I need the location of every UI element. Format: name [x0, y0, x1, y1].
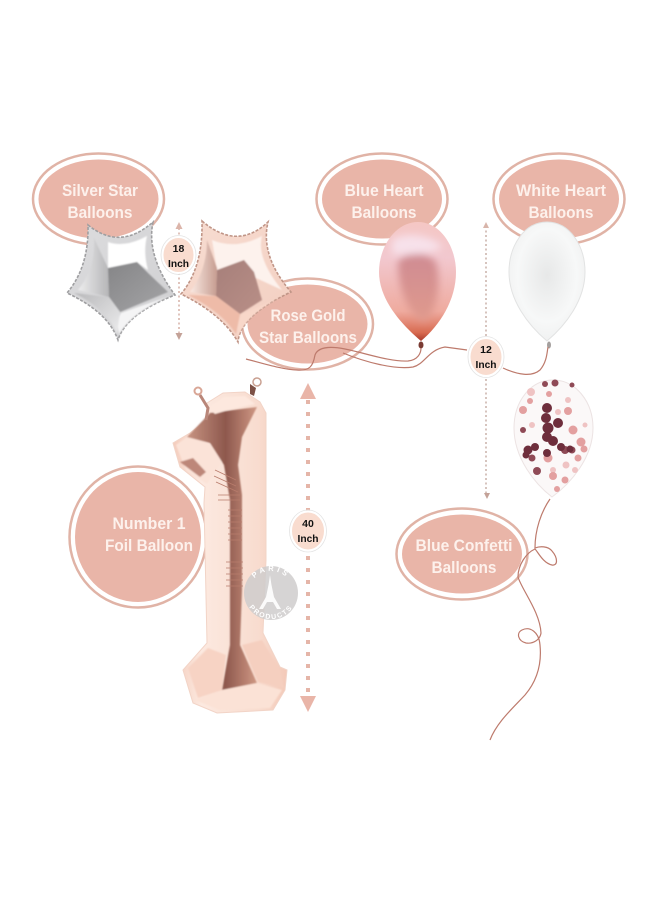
icon: silver star balloon: [67, 222, 175, 340]
callout: White Heart Balloons: [494, 154, 624, 244]
callout: Blue Heart Balloons: [316, 154, 448, 244]
callout: Silver Star Balloons: Silver Star: [62, 182, 139, 200]
callout: Blue Heart Balloons: Blue Heart: [344, 182, 424, 200]
callout: Number 1 Foil Balloon: Number 1: [112, 515, 186, 533]
badge: 40 inch: Inch: [298, 533, 318, 545]
icon: number 1 foil balloon: [173, 378, 287, 713]
callout: Blue Heart Balloons: Balloons: [352, 204, 416, 222]
arrow: 40 inch dimension: [300, 383, 316, 712]
callout: Rose Gold Star Balloons: Star Balloons: [259, 329, 357, 347]
badge: 40 inch: 40: [302, 518, 314, 530]
icon: white latex balloon: [509, 222, 585, 348]
badge: 18 inch: Inch: [168, 258, 189, 270]
icon: confetti balloon: [514, 380, 593, 497]
arrow: 18 inch dimension: [176, 222, 182, 340]
badge: 18 inch: [161, 236, 196, 274]
callout: White Heart Balloons: White Heart: [516, 182, 606, 200]
callout: Silver Star Balloons: [33, 154, 164, 244]
badge: 18 inch: 18: [173, 243, 184, 255]
callout: Silver Star Balloons: Balloons: [68, 204, 132, 222]
icon: rose gold star balloon: [181, 221, 291, 342]
arrow: 12 inch dimension: [483, 222, 490, 499]
badge: 12 inch: 12: [480, 344, 492, 356]
icon: pink latex balloon: [379, 222, 456, 348]
strings: balloon ribbons to rose gold callout: [246, 347, 548, 374]
watermark: Paris Products: [244, 566, 298, 620]
watermark: Paris Products: PRODUCTS: [249, 604, 292, 619]
callout: Rose Gold Star Balloons: [242, 278, 373, 370]
callout: Number 1 Foil Balloon: [70, 466, 206, 608]
watermark: Paris Products: PARIS: [252, 566, 288, 578]
callout: Blue Confetti Balloons: [396, 508, 528, 600]
callout: Rose Gold Star Balloons: Rose Gold: [270, 307, 346, 325]
badge: 12 inch: Inch: [476, 359, 496, 371]
callout: White Heart Balloons: Balloons: [528, 204, 594, 222]
callout: Number 1 Foil Balloon: Foil Balloon: [105, 537, 193, 555]
badge: 40 inch: [290, 510, 326, 552]
string: confetti balloon ribbon: [490, 499, 556, 740]
callout: Blue Confetti Balloons: Blue Confetti: [416, 537, 512, 555]
callout: Blue Confetti Balloons: Balloons: [432, 559, 496, 577]
badge: 12 inch: [468, 336, 504, 378]
